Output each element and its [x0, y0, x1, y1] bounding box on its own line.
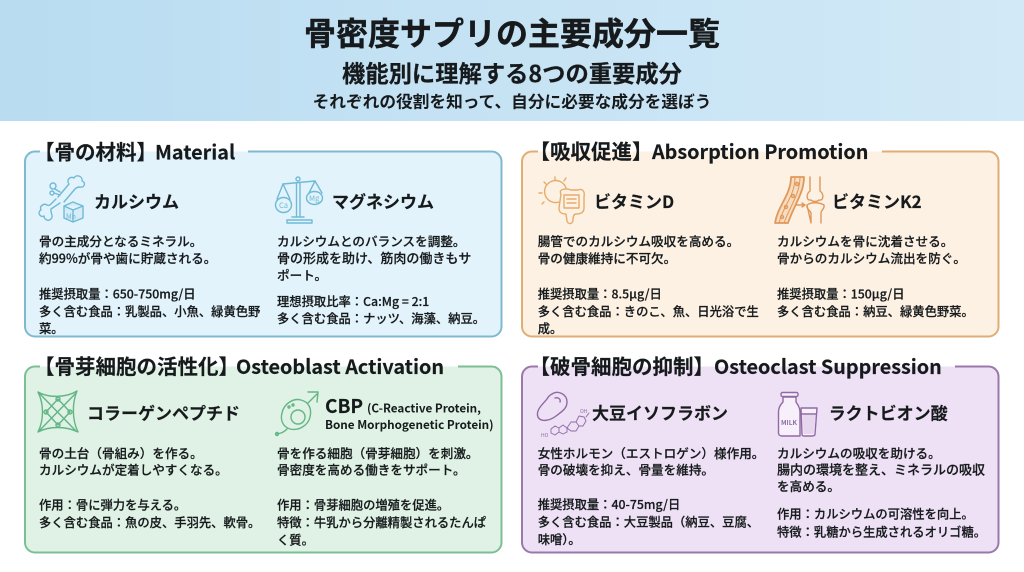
panel: osteoclast suppression — [522, 350, 998, 552]
ingredient name: vitamin K2: ビタミンK2 — [832, 188, 922, 213]
icon: balance scale: Mg — [309, 193, 320, 204]
icon: soybean and molecule — [537, 392, 589, 439]
description: vitamin D: 推奨摂取量：8.5μg/日 — [538, 284, 662, 302]
description: soy isoflavone: 多く含む食品：大豆製品（納豆、豆腐、 — [538, 512, 759, 530]
description: CBP: 特徴：牛乳から分離精製されるたんぱ — [277, 513, 487, 531]
description: lactobionic acid: 特徴：乳糖から生成されるオリゴ糖。 — [777, 522, 986, 540]
tagline: それぞれの役割を知って、自分に必要な成分を選ぼう — [313, 88, 711, 112]
description: magnesium — [277, 231, 485, 327]
ingredient name: vitamin D: ビタミンD — [594, 188, 674, 213]
description: vitamin K2: カルシウムを骨に沈着させる。 — [777, 231, 953, 250]
panel: absorption promotion — [522, 135, 998, 337]
ingredient name: soy isoflavone: 大豆イソフラボン — [592, 400, 728, 424]
description: vitamin K2: 推奨摂取量：150μg/日 — [777, 284, 905, 302]
description: CBP — [277, 443, 487, 548]
description: calcium: 菜。 — [39, 319, 64, 337]
ingredient name: calcium: カルシウム — [94, 188, 179, 213]
description: lactobionic acid: 腸内の環境を整え、ミネラルの吸収 — [777, 460, 985, 478]
description: calcium: 多く含む食品：乳製品、小魚、緑黄色野 — [39, 302, 260, 320]
icon: bone cell with arrow — [276, 392, 318, 436]
description: collagen peptide: 作用：骨に弾力を与える。 — [39, 496, 186, 514]
icon: soybean and molecule: OH — [580, 408, 588, 415]
ingredient name: CBP: CBP — [325, 392, 363, 419]
icon: bones and mineral cube — [39, 176, 84, 222]
description: magnesium: 理想摂取比率：Ca:Mg = 2:1 — [277, 292, 429, 310]
description: collagen peptide — [39, 443, 260, 531]
description: soy isoflavone: 骨の破壊を抑え、骨量を維持。 — [538, 460, 714, 478]
description: magnesium: カルシウムとのバランスを調整。 — [277, 231, 466, 250]
icon: collagen mesh — [38, 391, 78, 432]
icon: milk bottle and glass: MILK — [781, 417, 797, 427]
subtitle: 機能別に理解する8つの重要成分 — [342, 55, 682, 89]
description: magnesium: 骨の形成を助け、筋肉の働きもサ — [277, 248, 471, 267]
panel heading: absorption promotion: 【吸収促進】 — [530, 135, 652, 165]
description: vitamin D: 腸管でのカルシウム吸収を高める。 — [538, 231, 739, 250]
description: magnesium: 多く含む食品：ナッツ、海藻、納豆。 — [277, 309, 485, 327]
icon: sun and intestine — [539, 177, 584, 224]
description: CBP: 骨密度を高める働きをサポート。 — [277, 460, 466, 478]
ingredient name: lactobionic acid: ラクトビオン酸 — [829, 400, 948, 424]
description: lactobionic acid: 作用：カルシウムの可溶性を向上。 — [777, 504, 974, 522]
icon: soybean and molecule: HO — [541, 432, 549, 439]
description: soy isoflavone: 女性ホルモン（エストロゲン）様作用。 — [538, 443, 764, 462]
description: vitamin D: 多く含む食品：きのこ、魚、日光浴で生 — [538, 302, 759, 320]
panel heading: material: Material — [155, 136, 235, 166]
panel heading: osteoblast activation: Osteoblast Activation — [236, 351, 444, 380]
panel heading: absorption promotion: Absorption Promotion — [651, 136, 868, 165]
description: CBP: 骨を作る細胞（骨芽細胞）を刺激。 — [277, 443, 478, 462]
description: lactobionic acid: カルシウムの吸収を助ける。 — [777, 443, 941, 462]
CBP full name — [325, 400, 494, 433]
icon: blood vessel and joint — [775, 177, 824, 223]
description: calcium: 約99%が骨や歯に貯蔵される。 — [39, 248, 216, 267]
CBP full name: Bone Morphogenetic Protein) — [325, 416, 494, 433]
description: vitamin K2: 多く含む食品：納豆、緑黄色野菜。 — [777, 302, 974, 320]
description: CBP: く質。 — [277, 530, 314, 548]
panel: osteoblast activation — [25, 350, 502, 552]
description: vitamin D: 成。 — [538, 319, 562, 337]
description: magnesium: ポート。 — [277, 265, 327, 284]
panel heading: osteoblast activation: 【骨芽細胞の活性化】 — [34, 350, 239, 380]
description: vitamin K2 — [777, 231, 974, 320]
description: calcium: 骨の主成分となるミネラル。 — [39, 231, 202, 250]
ingredient name: magnesium: マグネシウム — [332, 188, 434, 213]
icon: balance scale: Ca — [279, 200, 288, 211]
header banner — [0, 0, 1024, 121]
description: collagen peptide: カルシウムが定着しやすくなる。 — [39, 460, 228, 478]
description: collagen peptide: 骨の土台（骨組み）を作る。 — [39, 443, 203, 462]
description: soy isoflavone: 味噌）。 — [538, 530, 581, 548]
description: soy isoflavone: 推奨摂取量：40-75mg/日 — [538, 495, 680, 513]
description: vitamin D — [538, 231, 759, 337]
CBP full name: (C-Reactive Protein, — [367, 400, 481, 417]
panel: material — [25, 136, 502, 337]
panel heading: osteoclast suppression: 【破骨細胞の抑制】 — [530, 350, 714, 380]
panel heading: osteoclast suppression: Osteoclast Suppression — [714, 351, 942, 380]
icon: bones and mineral cube: Mn — [66, 212, 76, 222]
description: lactobionic acid — [777, 443, 986, 540]
ingredient name: collagen peptide: コラーゲンペプチド — [87, 400, 240, 424]
description: vitamin D: 骨の健康維持に不可欠。 — [538, 248, 676, 267]
description: calcium: 推奨摂取量：650-750mg/日 — [39, 284, 196, 302]
panel heading: material: 【骨の材料】 — [34, 136, 157, 166]
description: vitamin K2: 骨からのカルシウム流出を防ぐ。 — [777, 248, 966, 267]
icon: balance scale — [276, 177, 322, 223]
description: calcium — [39, 231, 260, 337]
icon: milk bottle and glass — [778, 392, 817, 436]
description: lactobionic acid: を高める。 — [777, 476, 840, 495]
description: CBP: 作用：骨芽細胞の増殖を促進。 — [277, 496, 449, 514]
title: 骨密度サプリの主要成分一覧 — [304, 9, 720, 55]
description: soy isoflavone — [538, 443, 764, 548]
description: collagen peptide: 多く含む食品：魚の皮、手羽先、軟骨。 — [39, 513, 260, 531]
